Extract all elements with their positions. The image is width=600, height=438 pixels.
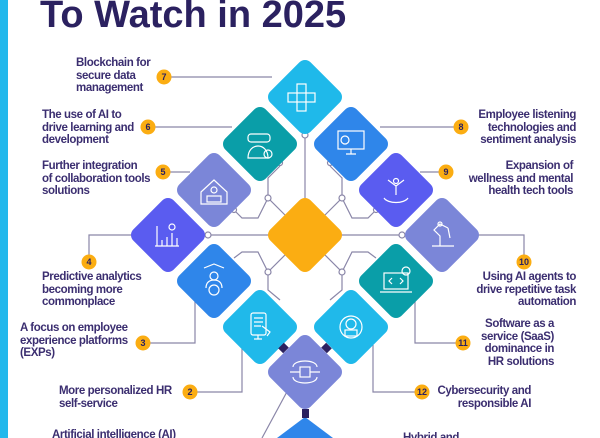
label 6 (42, 109, 134, 146)
label 2: self-service (59, 398, 118, 410)
label 5: Further integration (42, 160, 137, 172)
diagram: 10 (519, 257, 529, 267)
label 11: Software as a (485, 318, 554, 330)
label 2 (59, 385, 172, 410)
label 4: becoming more (42, 284, 122, 296)
label 7: Blockchain for (76, 57, 150, 69)
number badges (82, 70, 532, 400)
label 10: Using AI agents to (483, 271, 576, 283)
label 8: Employee listening (478, 109, 576, 121)
label 3: A focus on employee (20, 322, 128, 334)
label 9: Expansion of (506, 160, 573, 172)
label 12: Cybersecurity and (437, 385, 531, 397)
label 9: health tech tools (488, 185, 573, 197)
label 6: development (42, 134, 109, 146)
label 7: secure data (76, 70, 136, 82)
label 4: Predictive analytics (42, 271, 141, 283)
label 9 (468, 160, 574, 197)
label 8 (478, 109, 576, 146)
diagram: 5 (160, 167, 166, 177)
label 6: drive learning and (42, 122, 134, 134)
label 2: More personalized HR (59, 385, 172, 397)
diagram: 11 (458, 338, 468, 348)
label 7 (76, 57, 151, 94)
diagram: 9 (443, 167, 449, 177)
label 3 (20, 322, 128, 359)
label 10: automation (518, 296, 576, 308)
label 4: commonplace (42, 296, 115, 308)
diagram: 6 (145, 122, 151, 132)
diagram: 4 (86, 257, 92, 267)
label 8: sentiment analysis (480, 134, 576, 146)
label 5: of collaboration tools (42, 172, 150, 184)
diagram: 3 (140, 338, 146, 348)
label 4 (42, 271, 142, 308)
label 5 (42, 160, 150, 197)
diagram: 7 (161, 72, 167, 82)
label 3: (EXPs) (20, 347, 55, 359)
label 11 (481, 318, 554, 368)
label 6: The use of AI to (42, 109, 121, 121)
label 10 (476, 271, 576, 308)
label 7: management (76, 82, 143, 94)
label 9: wellness and mental (469, 172, 573, 184)
label 11: service (SaaS) (481, 330, 554, 342)
label 3: experience platforms (20, 334, 128, 346)
diamonds (128, 57, 482, 438)
diagram: 2 (187, 387, 193, 397)
diagram: 8 (458, 122, 464, 132)
icons (simple outlines) (155, 84, 454, 383)
label 5: solutions (42, 185, 90, 197)
diagram: 12 (417, 387, 427, 397)
label 10: drive repetitive task (476, 284, 576, 296)
label 8: technologies and (488, 122, 576, 134)
label 12 (437, 385, 531, 410)
left accent bar (0, 0, 8, 438)
label 11: HR solutions (488, 356, 554, 368)
label 11: dominance in (485, 343, 554, 355)
label 12: responsible AI (458, 398, 531, 410)
